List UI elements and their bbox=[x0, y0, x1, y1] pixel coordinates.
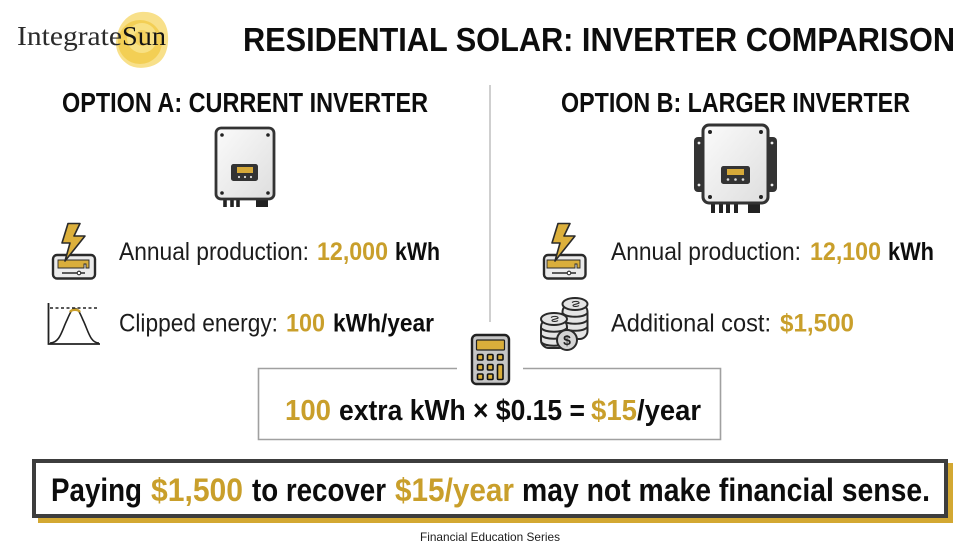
panel: option A bbox=[48, 87, 440, 344]
text: conclusion: to recover bbox=[252, 472, 386, 508]
text: conclusion: may not make financial sense. bbox=[522, 472, 930, 508]
icon: clipped energy curve bbox=[48, 303, 100, 344]
text: conclusion bbox=[51, 472, 930, 508]
text: additional cost: $1,500 bbox=[780, 310, 854, 338]
text: calculation: /year bbox=[637, 395, 701, 427]
icon: larger inverter bbox=[694, 125, 777, 213]
conclusion banner bbox=[34, 461, 953, 523]
text: clipped energy: Clipped energy: bbox=[119, 310, 278, 338]
text: clipped energy: kWh/year bbox=[333, 310, 434, 338]
text: calculation bbox=[285, 395, 701, 427]
text: annual production B: kWh bbox=[888, 238, 934, 266]
text: conclusion: Paying bbox=[51, 472, 142, 508]
icon: calculator bbox=[472, 335, 509, 384]
icon: production lightning bbox=[544, 224, 586, 278]
text: annual production B: Annual production: bbox=[611, 238, 801, 266]
text: calculation: $15 bbox=[591, 395, 637, 427]
text: clipped energy: 100 bbox=[286, 310, 325, 338]
text: conclusion: $15/year bbox=[395, 472, 514, 508]
text: calculation: 100 bbox=[285, 395, 331, 427]
calculation box bbox=[258, 335, 720, 440]
text: clipped energy bbox=[119, 310, 434, 338]
icon: current inverter bbox=[216, 128, 274, 207]
text: annual production A: Annual production: bbox=[119, 238, 309, 266]
divider bbox=[489, 85, 491, 322]
text: annual production B: 12,100 bbox=[810, 238, 881, 266]
text: additional cost bbox=[611, 310, 854, 338]
text: annual production B bbox=[611, 238, 934, 266]
logo: IntegrateSun: Sun bbox=[122, 21, 167, 51]
text: annual production A: kWh bbox=[395, 238, 440, 266]
panel: option B bbox=[541, 87, 934, 350]
icon: coin stacks: $ bbox=[563, 332, 571, 348]
icon: production lightning bbox=[53, 224, 95, 278]
icon: coin stacks bbox=[541, 298, 588, 350]
logo: IntegrateSun bbox=[17, 12, 168, 68]
text: additional cost: Additional cost: bbox=[611, 310, 771, 338]
text: conclusion: $1,500 bbox=[151, 472, 243, 508]
heading: option B: OPTION B: LARGER INVERTER bbox=[561, 87, 910, 118]
logo: IntegrateSun: Integrate bbox=[17, 21, 122, 51]
text: annual production A bbox=[119, 238, 440, 266]
heading: option A: OPTION A: CURRENT INVERTER bbox=[62, 87, 428, 118]
text: annual production A: 12,000 bbox=[317, 238, 388, 266]
footer: Financial Education Series bbox=[420, 530, 560, 544]
text: calculation: extra kWh × $0.15 = bbox=[339, 395, 585, 427]
